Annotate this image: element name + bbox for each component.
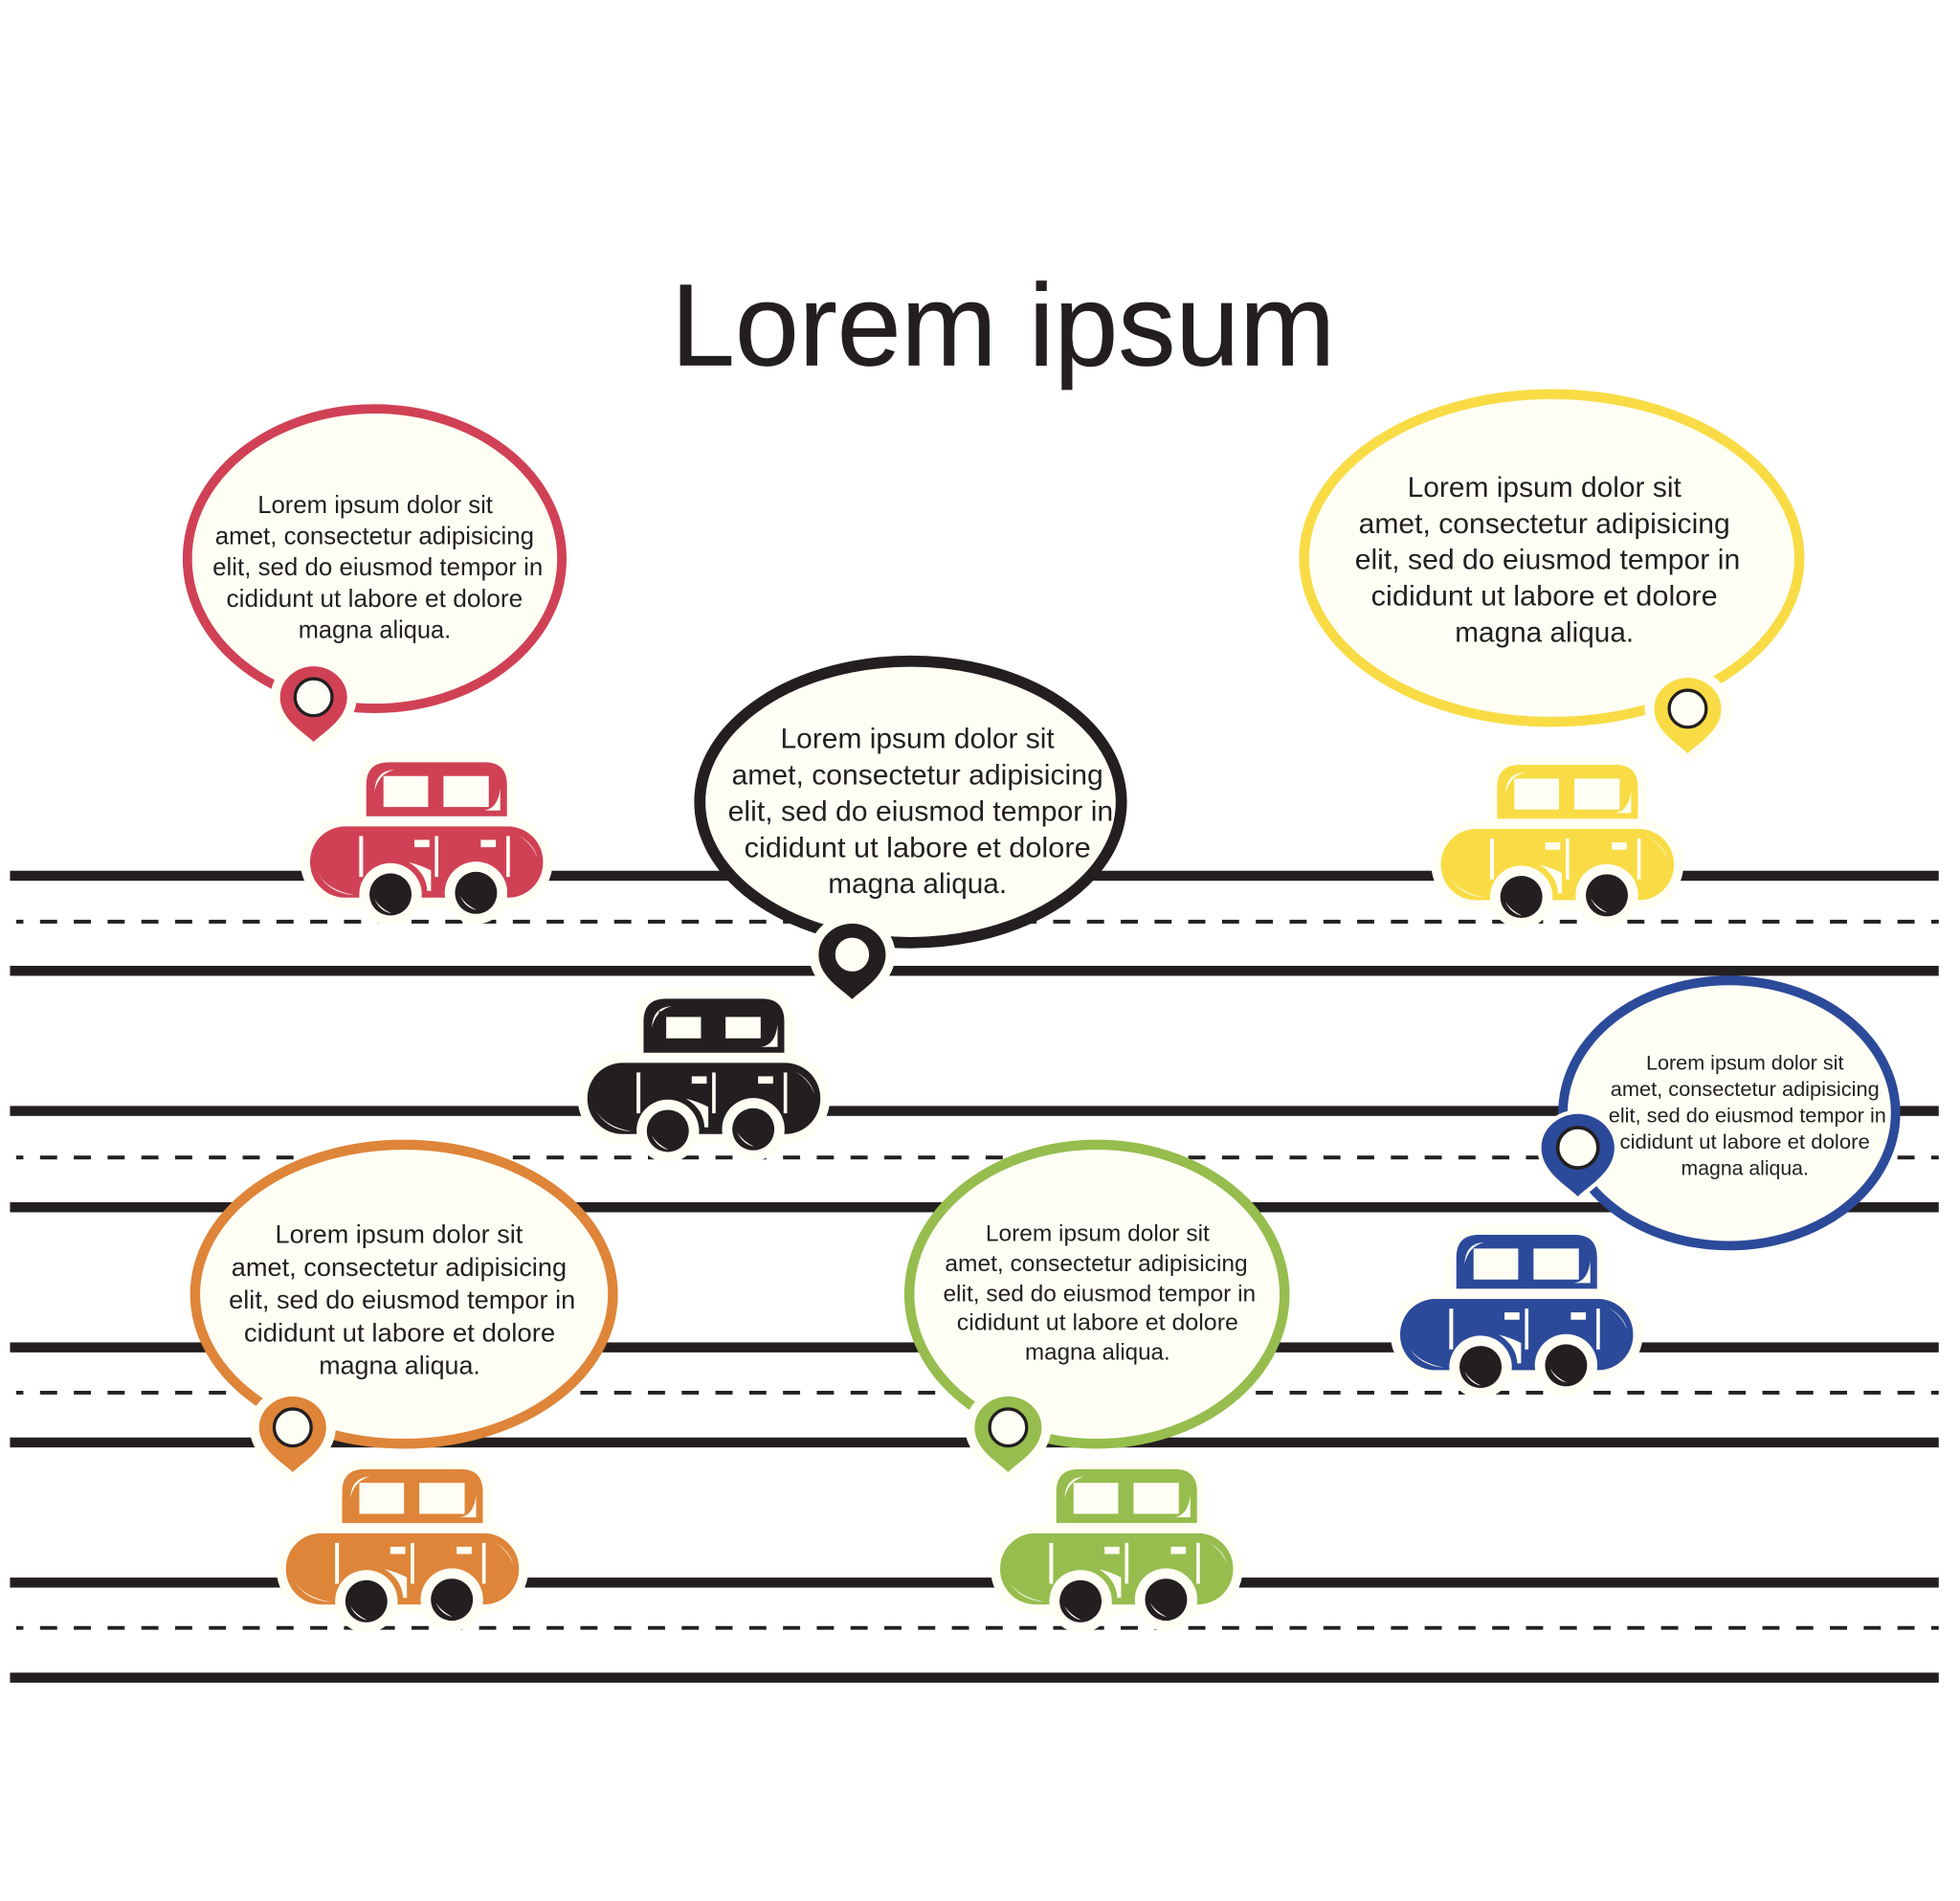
road 2 xyxy=(10,1106,1939,1212)
red bubble xyxy=(188,409,562,708)
panel: black callout xyxy=(700,661,1122,999)
blue bubble text: cididunt ut labore et dolore xyxy=(1620,1129,1870,1153)
orange bubble text: magna aliqua. xyxy=(319,1352,480,1380)
panel: red callout xyxy=(188,409,562,742)
orange bubble text: elit, sed do eiusmod tempor in xyxy=(229,1286,575,1314)
red bubble text: cididunt ut labore et dolore xyxy=(227,586,523,613)
black bubble text: amet, consectetur adipisicing xyxy=(732,760,1103,792)
green bubble xyxy=(909,1145,1284,1443)
icon: green pin xyxy=(974,1397,1041,1472)
panel: blue callout xyxy=(1542,980,1896,1245)
black bubble xyxy=(700,661,1122,943)
car: yellow xyxy=(1441,765,1674,928)
orange bubble text xyxy=(229,1220,575,1380)
panel: green callout xyxy=(909,1145,1284,1472)
road 4 xyxy=(10,1577,1939,1683)
yellow bubble xyxy=(1304,394,1799,722)
yellow bubble text: cididunt ut labore et dolore xyxy=(1371,581,1718,613)
car: orange xyxy=(286,1469,519,1633)
orange bubble xyxy=(195,1145,612,1443)
road 1 xyxy=(10,871,1939,975)
yellow bubble text: Lorem ipsum dolor sit xyxy=(1408,472,1682,503)
car: blue xyxy=(1400,1235,1633,1398)
red bubble text xyxy=(212,492,543,644)
yellow bubble text: amet, consectetur adipisicing xyxy=(1359,508,1730,540)
title: Lorem ipsum xyxy=(671,260,1335,391)
blue bubble text: elit, sed do eiusmod tempor in xyxy=(1609,1103,1886,1127)
black bubble text: elit, sed do eiusmod tempor in xyxy=(728,795,1113,827)
icon: red pin xyxy=(280,666,347,742)
blue bubble text: magna aliqua. xyxy=(1682,1155,1809,1179)
yellow bubble text: magna aliqua. xyxy=(1455,617,1634,649)
road 3 xyxy=(10,1342,1939,1447)
panel: orange callout xyxy=(195,1145,612,1472)
blue bubble text: Lorem ipsum dolor sit xyxy=(1646,1050,1843,1074)
blue bubble text xyxy=(1609,1050,1886,1179)
green bubble text: amet, consectetur adipisicing xyxy=(945,1251,1248,1277)
car: green xyxy=(1000,1469,1233,1633)
red bubble text: amet, consectetur adipisicing xyxy=(215,524,534,550)
yellow bubble text xyxy=(1355,472,1740,649)
green bubble text: magna aliqua. xyxy=(1025,1340,1170,1366)
black bubble text: cididunt ut labore et dolore xyxy=(745,832,1091,863)
green bubble text: elit, sed do eiusmod tempor in xyxy=(943,1281,1256,1307)
icon: blue pin xyxy=(1542,1114,1615,1197)
orange bubble text: cididunt ut labore et dolore xyxy=(244,1319,555,1348)
green bubble text: cididunt ut labore et dolore xyxy=(957,1309,1238,1335)
black bubble text: magna aliqua. xyxy=(828,868,1007,900)
orange bubble text: Lorem ipsum dolor sit xyxy=(276,1220,523,1249)
black bubble text: Lorem ipsum dolor sit xyxy=(781,724,1055,755)
blue bubble text: amet, consectetur adipisicing xyxy=(1611,1077,1880,1101)
car: red xyxy=(310,762,543,926)
red bubble text: magna aliqua. xyxy=(299,617,451,644)
red bubble text: Lorem ipsum dolor sit xyxy=(257,492,493,519)
car: black xyxy=(588,998,820,1162)
icon: orange pin xyxy=(259,1397,326,1472)
green bubble text xyxy=(943,1221,1256,1366)
blue bubble xyxy=(1563,980,1896,1245)
red bubble text: elit, sed do eiusmod tempor in xyxy=(212,554,543,581)
panel: yellow callout xyxy=(1304,394,1799,753)
icon: black pin xyxy=(818,924,885,999)
green bubble text: Lorem ipsum dolor sit xyxy=(986,1221,1210,1247)
orange bubble text: amet, consectetur adipisicing xyxy=(232,1253,567,1282)
icon: yellow pin xyxy=(1654,678,1721,753)
yellow bubble text: elit, sed do eiusmod tempor in xyxy=(1355,545,1740,576)
black bubble text xyxy=(728,724,1113,900)
